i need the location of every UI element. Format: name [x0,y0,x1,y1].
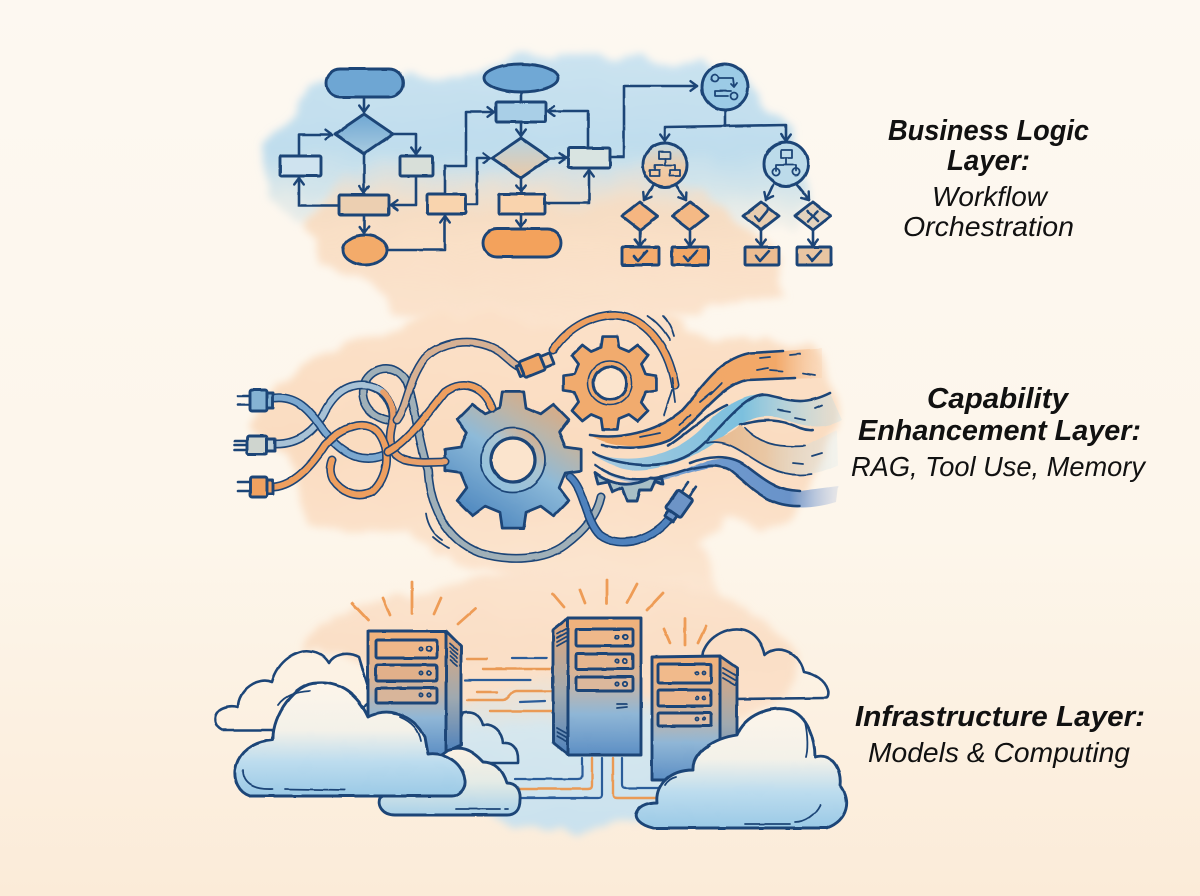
back right cloud [700,629,828,699]
label: capability enhancement layer: RAG, Tool Use, Memory [851,451,1147,482]
icon: orchestration node [702,64,748,110]
server 3 [652,656,737,780]
icon: hierarchy node left [643,143,687,187]
section: business logic workflow [280,64,831,265]
middle flowchart [427,64,610,257]
label: business logic layer [888,115,1089,242]
section: capability enhancement [235,315,842,558]
section: infrastructure [215,580,847,828]
label: infrastructure layer: Infrastructure Layer: [855,701,1145,733]
cloud behind first server [440,712,518,763]
tangled cables [274,315,675,558]
label: infrastructure layer [855,701,1145,768]
label: business logic layer: Business Logic [888,115,1089,147]
right decision tree [610,64,831,265]
small background gear [595,473,663,501]
data streams [590,348,842,507]
motion lines [426,316,674,548]
label: business logic layer: Orchestration [903,211,1074,242]
server 2 [553,618,641,755]
server 2 rays [553,580,663,610]
label: business logic layer: Workflow [932,181,1049,212]
watercolor washes [245,55,832,835]
label: infrastructure layer: Models & Computing [868,737,1130,768]
server 1 [368,631,461,755]
server 3 rays [664,618,706,645]
back left cloud [215,651,372,760]
icon: plugs [235,350,700,524]
label: business logic layer: Layer: [947,145,1030,177]
left flowchart [280,69,445,265]
icon: small orange gear [564,337,656,429]
label: capability enhancement layer: Enhancement Layer: [858,415,1141,447]
label: capability enhancement layer [851,383,1147,482]
icon: large blue gear [445,392,581,528]
icon: hierarchy node right [764,142,808,186]
server 1 rays [352,582,476,624]
label: capability enhancement layer: Capability [927,383,1070,415]
network lines between servers [465,658,660,798]
front left cloud [235,683,520,815]
front right cloud [636,709,847,828]
